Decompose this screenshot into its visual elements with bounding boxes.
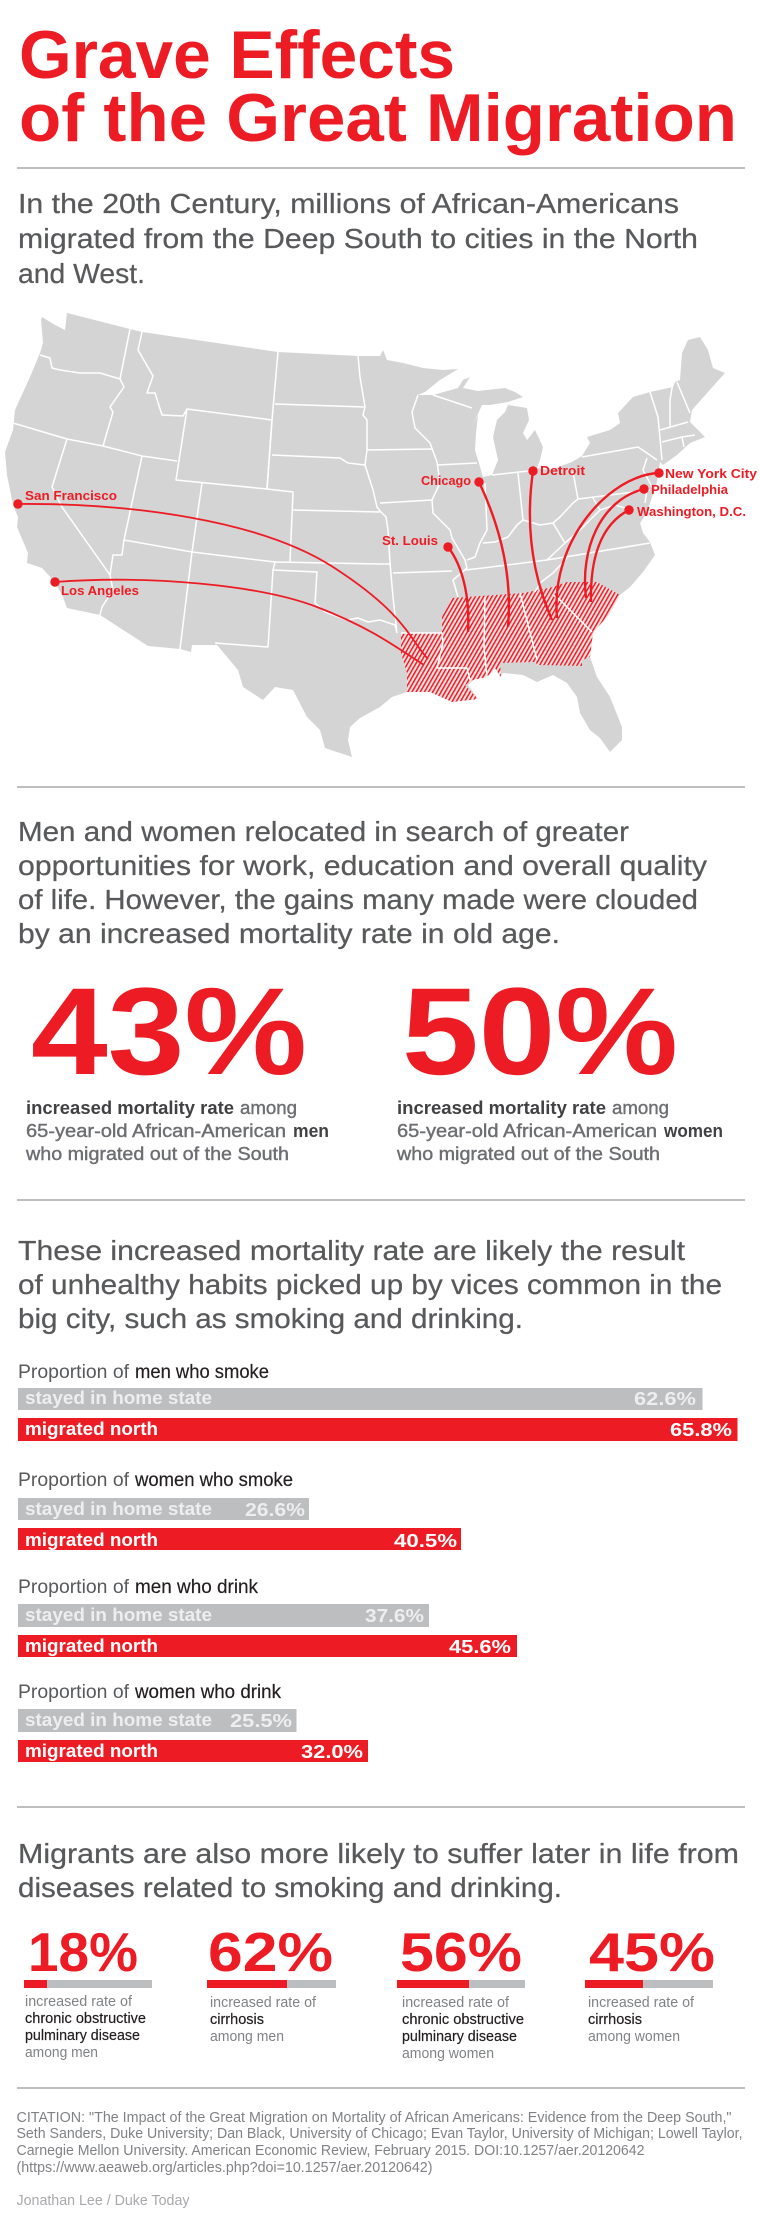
hatched Deep South states — [401, 582, 620, 702]
bar chart: women who drink: Proportion of — [18, 1682, 130, 1703]
stat: 56 percent COPD women: 56% — [400, 1921, 522, 1983]
citation: CITATION: "The Impact of the Great Migration on Mortality of African Americans: Evidence from the Deep South," — [16, 2110, 732, 2126]
bar chart: men who smoke: Proportion of — [18, 1362, 130, 1383]
city labels: Philadelphia — [651, 482, 729, 497]
stat: 18 percent COPD men: pulminary disease — [25, 2027, 140, 2044]
text: diseases paragraph: diseases related to smoking and drinking. — [18, 1872, 562, 1903]
bar chart: women who smoke: women who smoke — [134, 1470, 293, 1491]
stat: 18 percent COPD men: increased rate of — [25, 1993, 133, 2010]
bar chart: women who smoke: 40.5% — [394, 1530, 457, 1551]
stat: 50 percent women: increased mortality rate — [397, 1098, 606, 1118]
bar chart: men who smoke: 65.8% — [670, 1419, 732, 1440]
stat: 18 percent COPD men: chronic obstructive — [25, 2010, 146, 2027]
bar chart: women who smoke: 26.6% — [245, 1499, 305, 1520]
stat: 43 percent men: who migrated out of the South — [25, 1144, 289, 1164]
bar chart: women who smoke: Proportion of — [18, 1470, 130, 1491]
city labels: Chicago — [421, 473, 471, 488]
stat: 43 percent men: increased mortality rate — [26, 1098, 234, 1118]
title: of the Great Migration — [19, 80, 737, 156]
stat: 50 percent women: who migrated out of the South — [396, 1144, 660, 1164]
bar chart: men who drink: men who drink — [135, 1577, 258, 1598]
stat: 45 percent cirrhosis women: cirrhosis — [588, 2011, 642, 2028]
intro text: migrated from the Deep South to cities in the North — [18, 223, 698, 254]
text: habits paragraph: These increased mortality rate are likely the result — [18, 1235, 685, 1266]
city labels: San Francisco — [25, 488, 117, 503]
bar chart: men who drink — [18, 1577, 517, 1657]
stat: 62 percent cirrhosis men: cirrhosis — [210, 2011, 264, 2028]
state borders — [13, 329, 695, 680]
stat: 43 percent men: 43% — [31, 963, 307, 1101]
migration routes — [18, 471, 659, 665]
text: habits paragraph: of unhealthy habits picked up by vices common in the — [18, 1269, 722, 1300]
bar chart: men who drink: 45.6% — [449, 1636, 511, 1657]
stat: 56 percent COPD women: increased rate of — [402, 1994, 510, 2011]
citation: Carnegie Mellon University. American Economic Review, February 2015. DOI:10.1257/aer.20120642 — [16, 2143, 644, 2159]
stat: 50 percent women: 50% — [402, 963, 678, 1101]
text: relocation paragraph: by an increased mortality rate in old age. — [18, 918, 560, 949]
text: relocation paragraph: opportunities for work, education and overall quality — [18, 850, 707, 881]
bar chart: men who smoke: men who smoke — [135, 1362, 269, 1383]
bar chart: women who drink: 32.0% — [301, 1741, 363, 1762]
stat: 50 percent women — [396, 963, 723, 1164]
bar chart: men who drink: 37.6% — [365, 1605, 424, 1626]
stat: 43 percent men: 65-year-old African-American — [26, 1121, 286, 1141]
bar chart: women who smoke — [18, 1470, 461, 1551]
map: United States with migration routes — [5, 313, 758, 757]
text: diseases paragraph: Migrants are also more likely to suffer later in life from — [18, 1838, 739, 1869]
stat: 18 percent COPD men: 18% — [28, 1921, 138, 1983]
intro text: and West. — [18, 258, 145, 289]
text: habits paragraph: big city, such as smoking and drinking. — [18, 1303, 523, 1334]
bar chart: women who drink: migrated north — [25, 1740, 158, 1761]
citation: Seth Sanders, Duke University; Dan Black, University of Chicago; Evan Taylor, University of Michigan; Lowell Taylor, — [16, 2126, 742, 2142]
stat: 56 percent COPD women: chronic obstructive — [402, 2011, 524, 2028]
text: relocation paragraph — [18, 816, 707, 949]
intro text: In the 20th Century, millions of African-Americans — [18, 188, 679, 219]
city labels: Detroit — [540, 463, 586, 478]
city labels: Washington, D.C. — [637, 504, 746, 519]
stat: 62 percent cirrhosis men: increased rate of — [210, 1994, 317, 2011]
stat: 50 percent women: 65-year-old African-American — [397, 1121, 657, 1141]
bar chart: men who smoke: migrated north — [25, 1418, 158, 1439]
stat: 50 percent women: among — [612, 1098, 669, 1118]
text: diseases paragraph — [18, 1838, 739, 1903]
stat: 43 percent men: men — [293, 1121, 329, 1141]
credit: Jonathan Lee / Duke Today — [16, 2193, 190, 2209]
city dots — [13, 466, 664, 587]
stat: 18 percent COPD men: among men — [25, 2044, 98, 2061]
stat: 50 percent women: women — [663, 1121, 723, 1141]
citation — [16, 2110, 742, 2176]
bar chart: women who smoke: migrated north — [25, 1529, 158, 1550]
stat: 62 percent cirrhosis men: among men — [210, 2028, 284, 2045]
bar chart: women who drink: women who drink — [134, 1682, 281, 1703]
city labels — [25, 463, 758, 598]
stat: 56 percent COPD women: among women — [402, 2045, 494, 2062]
stat: 45 percent cirrhosis women: increased rate of — [588, 1994, 695, 2011]
bar chart: women who drink — [18, 1682, 368, 1762]
title — [19, 17, 737, 156]
text: relocation paragraph: Men and women relocated in search of greater — [18, 816, 629, 847]
stat: 43 percent men — [25, 963, 329, 1164]
map land outline — [5, 313, 725, 757]
city labels: New York City — [665, 466, 758, 481]
stat: 56 percent COPD women: pulminary disease — [402, 2028, 517, 2045]
citation: (https://www.aeaweb.org/articles.php?doi=10.1257/aer.20120642) — [16, 2160, 432, 2176]
stat: 18 percent COPD men — [24, 1921, 152, 2061]
stat: 45 percent cirrhosis women — [585, 1921, 715, 2045]
stat: 45 percent cirrhosis women: among women — [588, 2028, 680, 2045]
stat: 56 percent COPD women — [397, 1921, 525, 2062]
city labels: St. Louis — [382, 533, 438, 548]
city labels: Los Angeles — [61, 583, 139, 598]
text: relocation paragraph: of life. However, the gains many made were clouded — [18, 884, 698, 915]
stat: 45 percent cirrhosis women: 45% — [589, 1921, 715, 1983]
text: habits paragraph — [18, 1235, 722, 1334]
title: Grave Effects — [19, 17, 455, 93]
stat: 43 percent men: among — [240, 1098, 297, 1118]
bar chart: women who smoke: stayed in home state — [25, 1498, 212, 1519]
bar chart: men who drink: stayed in home state — [25, 1604, 212, 1625]
stat: 62 percent cirrhosis men — [207, 1921, 336, 2045]
bar chart: men who drink: Proportion of — [18, 1577, 130, 1598]
bar chart: men who smoke: 62.6% — [634, 1388, 696, 1409]
intro text — [18, 188, 698, 289]
bar chart: men who smoke — [18, 1362, 738, 1441]
bar chart: men who drink: migrated north — [25, 1635, 158, 1656]
stat: 62 percent cirrhosis men: 62% — [208, 1921, 333, 1983]
bar chart: women who drink: stayed in home state — [25, 1709, 212, 1730]
bar chart: men who smoke: stayed in home state — [25, 1387, 212, 1408]
bar chart: women who drink: 25.5% — [230, 1710, 292, 1731]
